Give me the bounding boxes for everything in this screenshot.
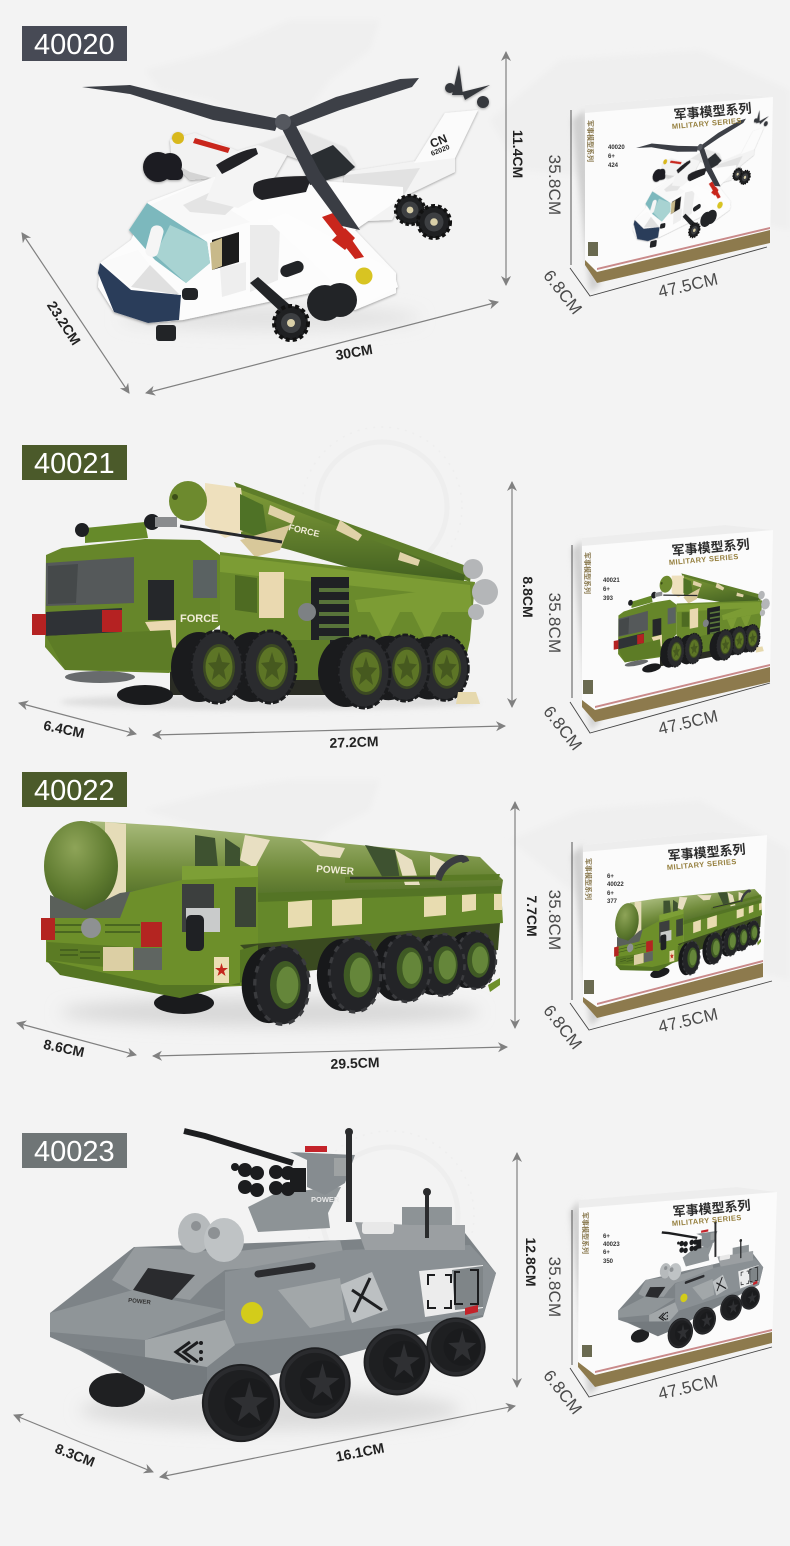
dimension: 12.8CM: 12.8CM (523, 1237, 539, 1287)
launcher model (32, 481, 498, 708)
launcher shadow (60, 694, 480, 710)
vehicle shadow (80, 1390, 460, 1430)
product box: 40023: 6.8CM (539, 1366, 586, 1418)
panel: 40023 armored vehicle (14, 1128, 777, 1477)
launcher markings: FORCE (180, 613, 218, 625)
dimension: 8.6CM: 8.6CM (42, 1036, 86, 1060)
dimension: 23.2CM: 23.2CM (44, 298, 84, 348)
product box: 40020 (539, 93, 773, 318)
product box: 40022: 47.5CM (656, 1004, 720, 1037)
vehicle markings (128, 1195, 340, 1306)
dimension: 16.1CM (160, 1406, 515, 1477)
dimension: 16.1CM: 16.1CM (334, 1439, 386, 1465)
product box: 40021: 军事模型系列 (671, 537, 750, 558)
dimension: 6.4CM (19, 703, 136, 741)
helicopter tail marking (428, 131, 451, 158)
carrier shadow (60, 998, 480, 1026)
launcher markings: FORCE (288, 522, 320, 539)
product box: 40021: 393 (603, 596, 614, 602)
product box: 40020: 47.5CM (656, 269, 720, 302)
product box: 40023: 40023 (603, 1242, 620, 1248)
carrier model (41, 821, 503, 1024)
carrier markings: POWER (316, 864, 355, 878)
launcher markings (180, 522, 320, 625)
label: 40020: 40020 (34, 29, 115, 61)
dimension: 30CM: 30CM (334, 341, 374, 363)
product box: 40023: 军事模型系列 (672, 1198, 751, 1219)
product box: 40021: 6.8CM (539, 702, 586, 754)
product box: 40022 (539, 832, 772, 1053)
helicopter shadow (120, 306, 420, 330)
vehicle markings: POWER (128, 1298, 152, 1306)
dimension: 30CM (146, 302, 498, 393)
dimension: 27.2CM: 27.2CM (329, 733, 379, 751)
label: 40023: 40023 (34, 1136, 115, 1168)
product box: 40023: 军事模型系列 (581, 1212, 590, 1254)
dimension: 27.2CM (153, 726, 505, 751)
product box: 40020: 6.8CM (539, 266, 586, 318)
dimension: 8.8CM: 8.8CM (520, 576, 536, 618)
product box: 40022: 军事模型系列 (584, 858, 593, 900)
product box: 40023 (539, 1187, 777, 1418)
product box: 40021 (539, 525, 773, 754)
product box: 40022: 6.8CM (539, 1001, 586, 1053)
product box: 40021: 6+ (603, 587, 610, 593)
helicopter tail marking: CN (428, 131, 449, 151)
product box: 40020: 35.8CM (545, 155, 564, 215)
product box: 40022: 35.8CM (545, 890, 564, 950)
product box: 40022: MILITARY SERIES (666, 857, 737, 872)
product box: 40023: 47.5CM (656, 1371, 720, 1404)
product box: 40022: 377 (607, 899, 618, 905)
product box: 40020: 40020 (608, 145, 625, 151)
product box: 40023: 350 (603, 1259, 614, 1265)
product box: 40023: 6+ (603, 1250, 610, 1256)
product box: 40021: MILITARY SERIES (668, 552, 739, 567)
dimension: 8.3CM (14, 1415, 153, 1472)
vehicle markings: POWER (311, 1195, 340, 1204)
product box: 40021: 军事模型系列 (583, 552, 592, 594)
label: 40021: 40021 (34, 448, 115, 480)
panel: 40022 missile carrier (17, 772, 772, 1072)
background: faint world maps and tech rings (145, 20, 790, 1299)
label: 40022: 40022 (34, 775, 115, 807)
product box: 40023: 6+ (603, 1234, 610, 1240)
product box: 40020: 6+ (608, 154, 615, 160)
dimension: 29.5CM: 29.5CM (330, 1054, 380, 1072)
product box: 40022: 40022 (607, 882, 624, 888)
panel: 40021 missile launcher (19, 445, 773, 754)
dimension: 23.2CM (22, 233, 129, 393)
product box: 40020: 军事模型系列 (586, 120, 595, 162)
dimension: 8.3CM: 8.3CM (53, 1440, 97, 1470)
product box: 40020: MILITARY SERIES (671, 116, 742, 131)
product box: 40023: MILITARY SERIES (671, 1213, 742, 1228)
product box: 40022: 6+ (607, 874, 614, 880)
armored vehicle model (50, 1128, 496, 1442)
product box: 40022: 6+ (607, 891, 614, 897)
product box: 40021: 35.8CM (545, 593, 564, 653)
product box: 40021: 47.5CM (656, 706, 720, 739)
dimension: 8.6CM (17, 1023, 136, 1060)
dimension: 11.4CM: 11.4CM (510, 130, 526, 178)
dimension: 7.7CM: 7.7CM (524, 895, 540, 937)
helicopter model (82, 65, 490, 341)
dimension: 6.4CM: 6.4CM (42, 717, 86, 741)
product box: 40020: 军事模型系列 (673, 101, 752, 122)
product box: 40023: 35.8CM (545, 1257, 564, 1317)
helicopter tail marking: 62020 (430, 144, 451, 158)
product box: 40021: 40021 (603, 578, 620, 584)
product box: 40022: 军事模型系列 (667, 842, 746, 863)
panel: 40020 helicopter (22, 26, 773, 393)
dimension: 29.5CM (153, 1047, 507, 1072)
product box: 40020: 424 (608, 163, 619, 169)
